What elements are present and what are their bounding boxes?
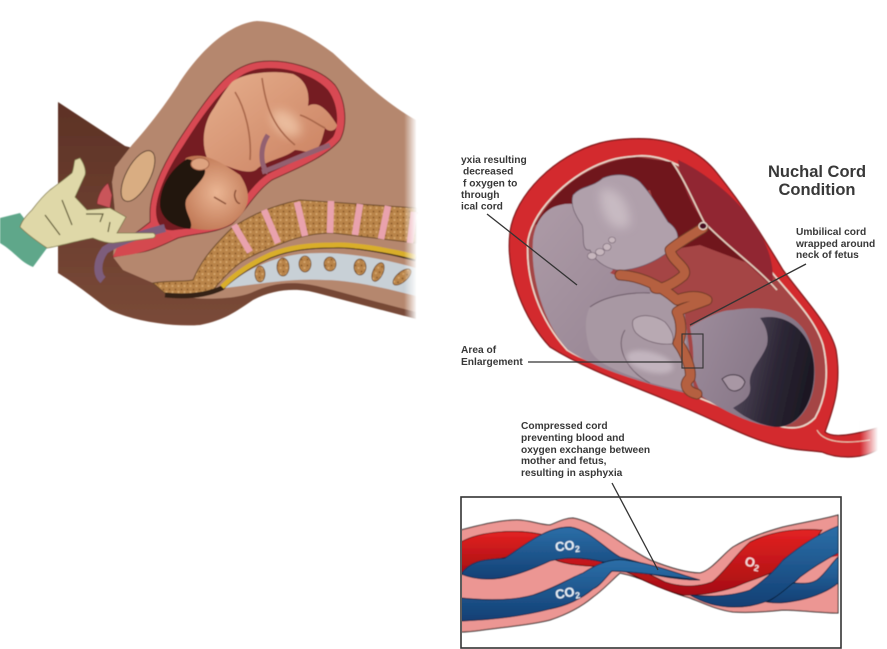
fetal arm	[586, 293, 690, 392]
cervix fade	[860, 420, 878, 462]
label: umbilical cord wrapped: neck of fetus	[796, 250, 859, 261]
vein right main	[690, 526, 838, 607]
label: asphyxia description: decreased	[463, 166, 513, 178]
fetal head	[690, 308, 815, 427]
artery right stub	[832, 552, 839, 558]
fetal hair	[733, 317, 814, 427]
vein right branch	[767, 557, 838, 603]
umbilical cord	[262, 135, 330, 172]
oxygen and carbon dioxide labels	[554, 540, 760, 600]
spinous processes	[255, 256, 414, 288]
leader: area of enlargement	[528, 361, 682, 363]
label: compressed cord: preventing blood and	[521, 433, 625, 444]
fetal ear	[722, 375, 745, 391]
label: umbilical cord wrapped: Umbilical cord	[796, 227, 866, 238]
leader: asphyxia label	[487, 214, 577, 285]
fetal limb crease	[235, 78, 325, 160]
placental membrane line	[672, 162, 777, 290]
label: area of enlargement: Enlargement	[461, 357, 523, 368]
fetal body and leg	[204, 72, 337, 172]
vein upper left	[461, 527, 700, 580]
toes	[588, 237, 616, 260]
O2: O	[743, 554, 757, 570]
artery centre	[548, 530, 822, 595]
label: asphyxia description: yxia resulting	[461, 155, 527, 166]
vagina and examining canal	[113, 228, 173, 257]
label: compressed cord: oxygen exchange between	[521, 445, 650, 456]
folded leg and foot	[572, 175, 678, 270]
cord outline	[620, 228, 707, 394]
cord fill	[620, 228, 707, 394]
uterine wall	[113, 61, 345, 257]
leg highlight	[600, 189, 630, 228]
label: compressed cord: Compressed cord	[521, 421, 608, 432]
spine	[153, 200, 416, 296]
label: compressed cord: resulting in asphyxia	[521, 468, 623, 479]
spinal cord	[222, 245, 416, 287]
artery left	[462, 530, 542, 575]
fetal ear	[191, 158, 209, 170]
fade at crop edge	[404, 100, 417, 325]
vulva tissue	[97, 183, 112, 208]
maternal abdomen tissue	[112, 21, 416, 312]
arm highlight	[624, 346, 676, 378]
illustration: cervical examination cross-section	[0, 21, 417, 325]
placenta	[678, 160, 773, 287]
panel frame	[461, 497, 841, 648]
uterus	[113, 61, 345, 257]
umbilical cord	[620, 228, 707, 394]
CO2 lower: 2	[574, 590, 581, 601]
intervertebral discs	[234, 201, 414, 252]
leader: compressed cord	[612, 483, 658, 570]
label: umbilical cord wrapped: wrapped around	[795, 239, 875, 250]
fetal facial features	[214, 190, 240, 204]
body highlights	[272, 110, 301, 136]
fetal body	[533, 204, 695, 395]
panel contents	[461, 515, 838, 632]
label: asphyxia description: f oxygen to	[463, 178, 517, 190]
glove creases	[45, 200, 110, 235]
CO2 lower: CO	[554, 584, 576, 602]
maternal body silhouette	[58, 102, 416, 325]
cord sheath	[461, 515, 838, 632]
fetal hand	[632, 316, 673, 344]
uterine cavity	[528, 156, 826, 428]
CO2 upper: CO	[554, 537, 575, 554]
illustration: nuchal cord in uterus	[509, 139, 878, 462]
title: Condition	[779, 181, 855, 199]
fetal hair	[160, 159, 205, 229]
label: area of enlargement: Area of	[461, 345, 497, 356]
amniotic dark upper region	[535, 157, 745, 262]
title: Nuchal Cord	[768, 163, 866, 181]
O2: 2	[753, 563, 760, 573]
label: asphyxia description: ical cord	[461, 202, 503, 212]
enlargement panel: compressed cord	[461, 497, 841, 648]
leader: umbilical cord label	[690, 264, 806, 325]
vein lower left	[461, 560, 700, 621]
fetal face	[178, 156, 248, 230]
label: compressed cord: mother and fetus,	[521, 456, 607, 467]
gloved hand	[20, 158, 155, 248]
fetus	[160, 72, 337, 230]
cervix canal	[817, 430, 870, 442]
label: asphyxia description: through	[461, 190, 499, 201]
spinal canal	[165, 246, 416, 296]
rectum tissue	[98, 228, 165, 280]
CO2 upper: 2	[574, 544, 580, 554]
ligament band	[225, 253, 416, 296]
surgical sleeve	[0, 213, 47, 267]
uterine cavity	[156, 68, 337, 230]
arm contour	[590, 293, 650, 383]
pubic bone	[114, 146, 162, 206]
vertebral band	[153, 200, 416, 296]
cord attachment	[699, 222, 707, 230]
uterine wall outer	[509, 139, 877, 457]
area of enlargement box	[682, 334, 703, 368]
